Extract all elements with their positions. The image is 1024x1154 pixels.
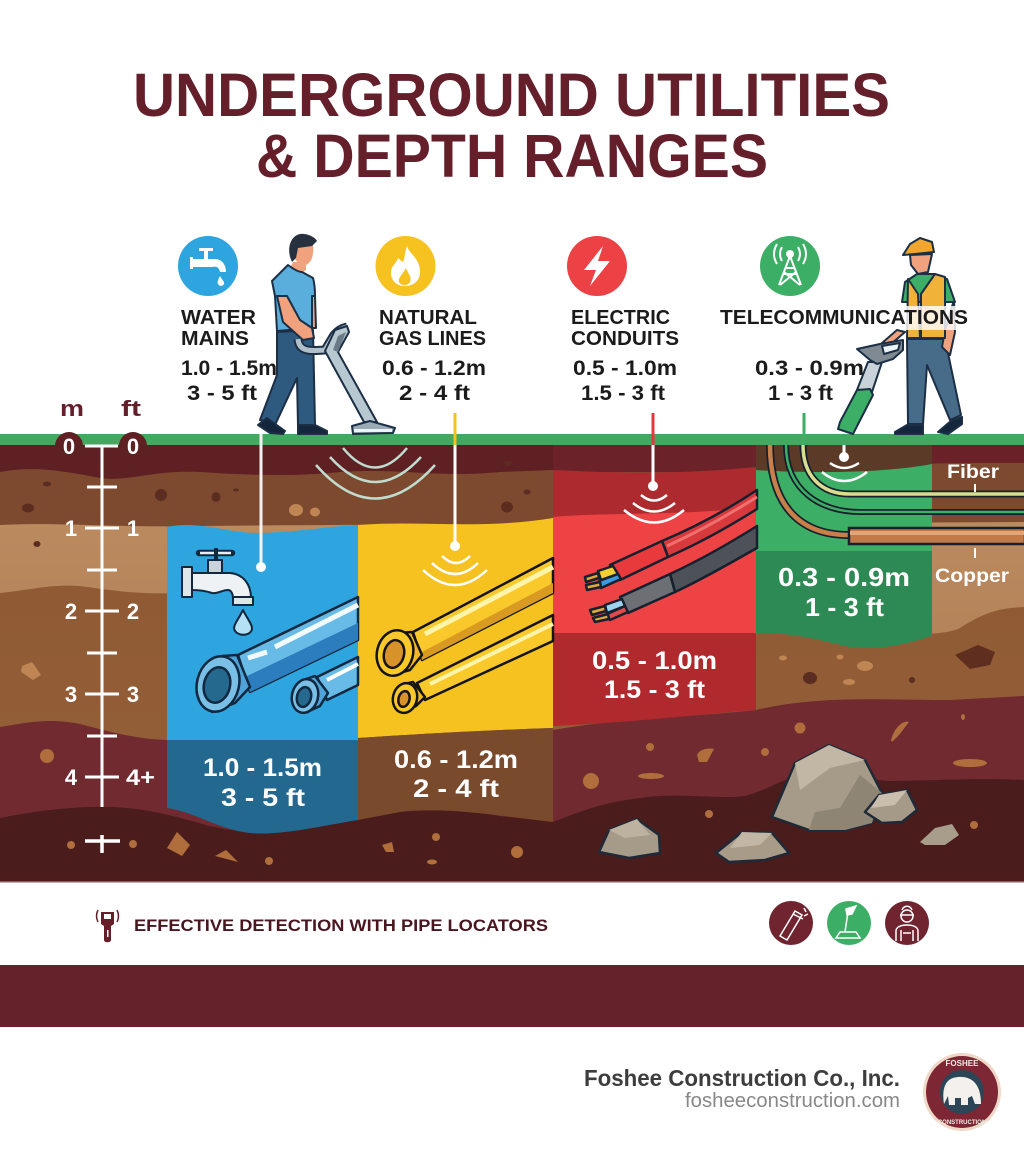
gas pipes bbox=[372, 558, 553, 715]
label: water mains: MAINS bbox=[181, 328, 249, 350]
label: water mains: 3 - 5 ft bbox=[187, 382, 257, 405]
scale units bbox=[60, 396, 142, 421]
label: natural gas lines: NATURAL bbox=[379, 307, 477, 329]
signal: electric line and arcs bbox=[624, 413, 684, 522]
label: electric conduits: CONDUITS bbox=[571, 328, 679, 350]
label: electric conduits: ELECTRIC bbox=[571, 307, 670, 329]
label: copper: Copper bbox=[935, 566, 1010, 587]
label: electric conduits: 0.5 - 1.0m bbox=[573, 357, 677, 380]
label: telecommunications bbox=[720, 307, 968, 405]
title: UNDERGROUND UTILITIES bbox=[133, 61, 890, 129]
footer tagline: EFFECTIVE DETECTION WITH PIPE LOCATORS bbox=[134, 916, 548, 935]
telecom cables bbox=[770, 445, 1024, 535]
label: natural gas lines bbox=[379, 307, 486, 405]
scale units: m bbox=[60, 396, 84, 421]
ground base line bbox=[0, 881, 1024, 882]
label: telecommunications: 0.3 - 0.9m bbox=[755, 357, 864, 380]
label: water mains: 1.0 - 1.5m bbox=[181, 357, 277, 380]
depth value: gas bbox=[394, 746, 518, 803]
signal: gas line and arcs bbox=[423, 413, 487, 585]
depth value: telecom: 1 - 3 ft bbox=[805, 592, 884, 622]
footer band bbox=[0, 965, 1024, 1027]
depth value: gas: 0.6 - 1.2m bbox=[394, 746, 518, 774]
panel: water column bbox=[167, 525, 358, 834]
signal: water line and dot bbox=[256, 434, 266, 572]
company logo: FOSHEE bbox=[946, 1059, 979, 1068]
label: natural gas lines: 0.6 - 1.2m bbox=[382, 357, 486, 380]
surface grass line bbox=[0, 434, 1024, 445]
label: water mains bbox=[181, 307, 277, 405]
icon: worker badge bbox=[885, 901, 929, 945]
depth scale: 2 bbox=[127, 599, 139, 624]
title bbox=[133, 61, 890, 190]
depth scale: 1 bbox=[127, 516, 139, 541]
depth value: telecom: 0.3 - 0.9m bbox=[778, 562, 910, 592]
icon: water circle bbox=[178, 236, 238, 296]
depth value: telecom bbox=[778, 562, 910, 622]
signal: man's locator arcs bbox=[316, 448, 435, 498]
depth value: electric: 0.5 - 1.0m bbox=[592, 647, 717, 675]
man operating locator bbox=[258, 234, 395, 434]
electric cables bbox=[585, 490, 757, 622]
depth value: water bbox=[203, 754, 322, 812]
depth scale: 3 bbox=[65, 682, 77, 707]
rock: left bbox=[599, 819, 660, 858]
company logo: CONSTRUCTION bbox=[938, 1120, 986, 1126]
company name: Foshee Construction Co., Inc. bbox=[584, 1065, 900, 1091]
icon: locator device badge bbox=[827, 901, 871, 945]
depth scale bbox=[55, 396, 155, 853]
rock: middle bbox=[716, 832, 789, 862]
icon: telecom tower circle bbox=[760, 236, 820, 296]
depth value: gas: 2 - 4 ft bbox=[413, 775, 500, 803]
copper conduit bbox=[849, 528, 1024, 544]
depth value: electric: 1.5 - 3 ft bbox=[604, 676, 706, 704]
title: & DEPTH RANGES bbox=[256, 122, 768, 190]
depth scale: 1 bbox=[65, 516, 77, 541]
soil pebbles bbox=[21, 461, 995, 865]
label: telecommunications: 1 - 3 ft bbox=[768, 382, 833, 405]
label: electric conduits: 1.5 - 3 ft bbox=[581, 382, 665, 405]
depth value: water: 1.0 - 1.5m bbox=[203, 754, 322, 782]
depth scale: 4 bbox=[65, 765, 78, 790]
depth scale: 0 bbox=[127, 434, 139, 459]
rock: pale bbox=[920, 824, 959, 845]
depth scale: 2 bbox=[65, 599, 77, 624]
company url: fosheeconstruction.com bbox=[685, 1090, 900, 1112]
label: electric conduits bbox=[571, 307, 679, 405]
rock: small right bbox=[865, 790, 917, 823]
depth value: water: 3 - 5 ft bbox=[221, 784, 306, 812]
rock: large boulder bbox=[772, 745, 882, 830]
icon: flashlight badge bbox=[769, 901, 813, 945]
label: natural gas lines: 2 - 4 ft bbox=[399, 382, 470, 405]
depth scale: 3 bbox=[127, 682, 139, 707]
water pipes bbox=[191, 597, 358, 716]
soil cross-section bbox=[0, 234, 1024, 1131]
icon: handheld locator bbox=[96, 910, 118, 942]
label: natural gas lines: GAS LINES bbox=[379, 328, 486, 350]
icon: gas flame circle bbox=[376, 236, 436, 296]
label: copper bbox=[935, 548, 1010, 587]
worker with locator bbox=[838, 238, 962, 434]
label: telecommunications: TELECOMMUNICATIONS bbox=[720, 307, 968, 329]
panel: gas column bbox=[358, 518, 553, 822]
signal: telecom line and arcs bbox=[804, 413, 867, 481]
depth value: electric bbox=[592, 647, 717, 704]
panel: telecom column bbox=[756, 445, 1024, 648]
panel: electric column bbox=[553, 445, 757, 726]
translucent band behind telecom label bbox=[900, 306, 968, 330]
label: fiber: Fiber bbox=[947, 462, 1000, 483]
icon: faucet bbox=[182, 548, 253, 635]
depth scale: 4+ bbox=[126, 765, 155, 790]
label: fiber bbox=[947, 462, 1000, 492]
label: water mains: WATER bbox=[181, 307, 257, 329]
scale units: ft bbox=[121, 396, 142, 421]
company logo bbox=[923, 1053, 1001, 1131]
depth scale: 0 bbox=[63, 434, 75, 459]
icon: electric bolt circle bbox=[567, 236, 627, 296]
